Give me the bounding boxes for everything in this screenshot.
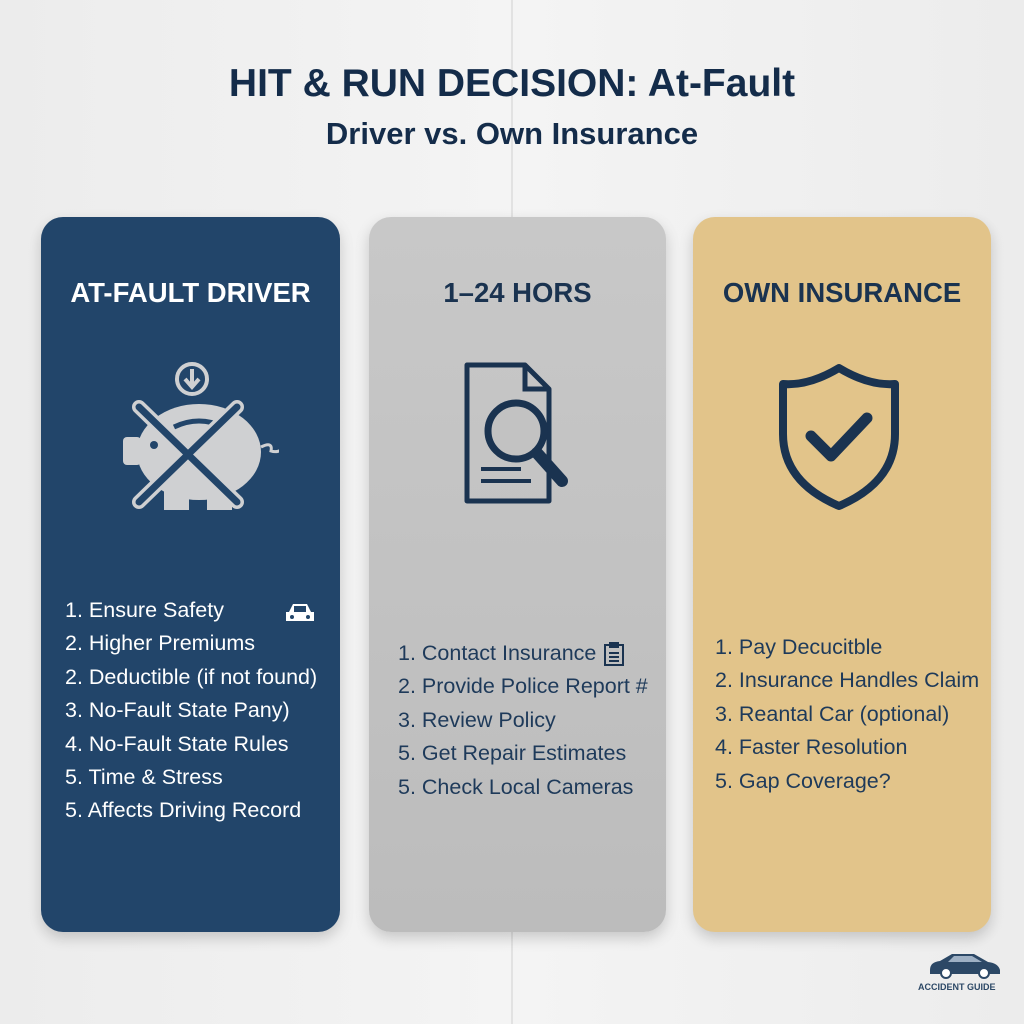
list: 3. Reantal Car (optional) <box>715 702 949 726</box>
list: 3. Review Policy <box>398 708 556 732</box>
list: 4. No-Fault State Rules <box>65 732 288 756</box>
list: 1. Contact Insurance <box>398 641 596 665</box>
list: 2. Provide Police Report # <box>398 674 648 698</box>
list: 4. Faster Resolution <box>715 735 907 759</box>
panel: 1-24 hours <box>369 217 666 932</box>
list: 2. Insurance Handles Claim <box>715 668 979 692</box>
list: 5. Time & Stress <box>65 765 223 789</box>
icon: shield check <box>779 364 899 510</box>
panel: own insurance <box>693 217 991 932</box>
list <box>65 598 317 822</box>
list: 2. Higher Premiums <box>65 631 255 655</box>
logo: accident guide: ACCIDENT GUIDE <box>918 982 996 992</box>
list: 2. Deductible (if not found) <box>65 665 317 689</box>
list: 1. Pay Decucitble <box>715 635 882 659</box>
panel: at-fault driver <box>41 217 340 932</box>
list: 3. No-Fault State Pany) <box>65 698 290 722</box>
heading: AT-FAULT DRIVER <box>70 277 311 308</box>
list: 5. Get Repair Estimates <box>398 741 626 765</box>
list <box>398 641 648 799</box>
list: 5. Check Local Cameras <box>398 775 633 799</box>
list: 5. Gap Coverage? <box>715 769 891 793</box>
icon: crossed piggy bank <box>123 362 279 510</box>
subtitle: Driver vs. Own Insurance <box>326 116 698 151</box>
title: HIT & RUN DECISION: At-Fault <box>229 62 795 105</box>
logo: accident guide <box>918 954 1000 992</box>
heading: 1–24 HORS <box>443 277 592 308</box>
list: 5. Affects Driving Record <box>65 798 301 822</box>
icon: car <box>286 604 314 621</box>
icon: document with magnifier <box>464 362 568 504</box>
heading: OWN INSURANCE <box>723 277 961 308</box>
icon: clipboard <box>604 642 624 666</box>
list <box>715 635 979 793</box>
list: 1. Ensure Safety <box>65 598 224 622</box>
